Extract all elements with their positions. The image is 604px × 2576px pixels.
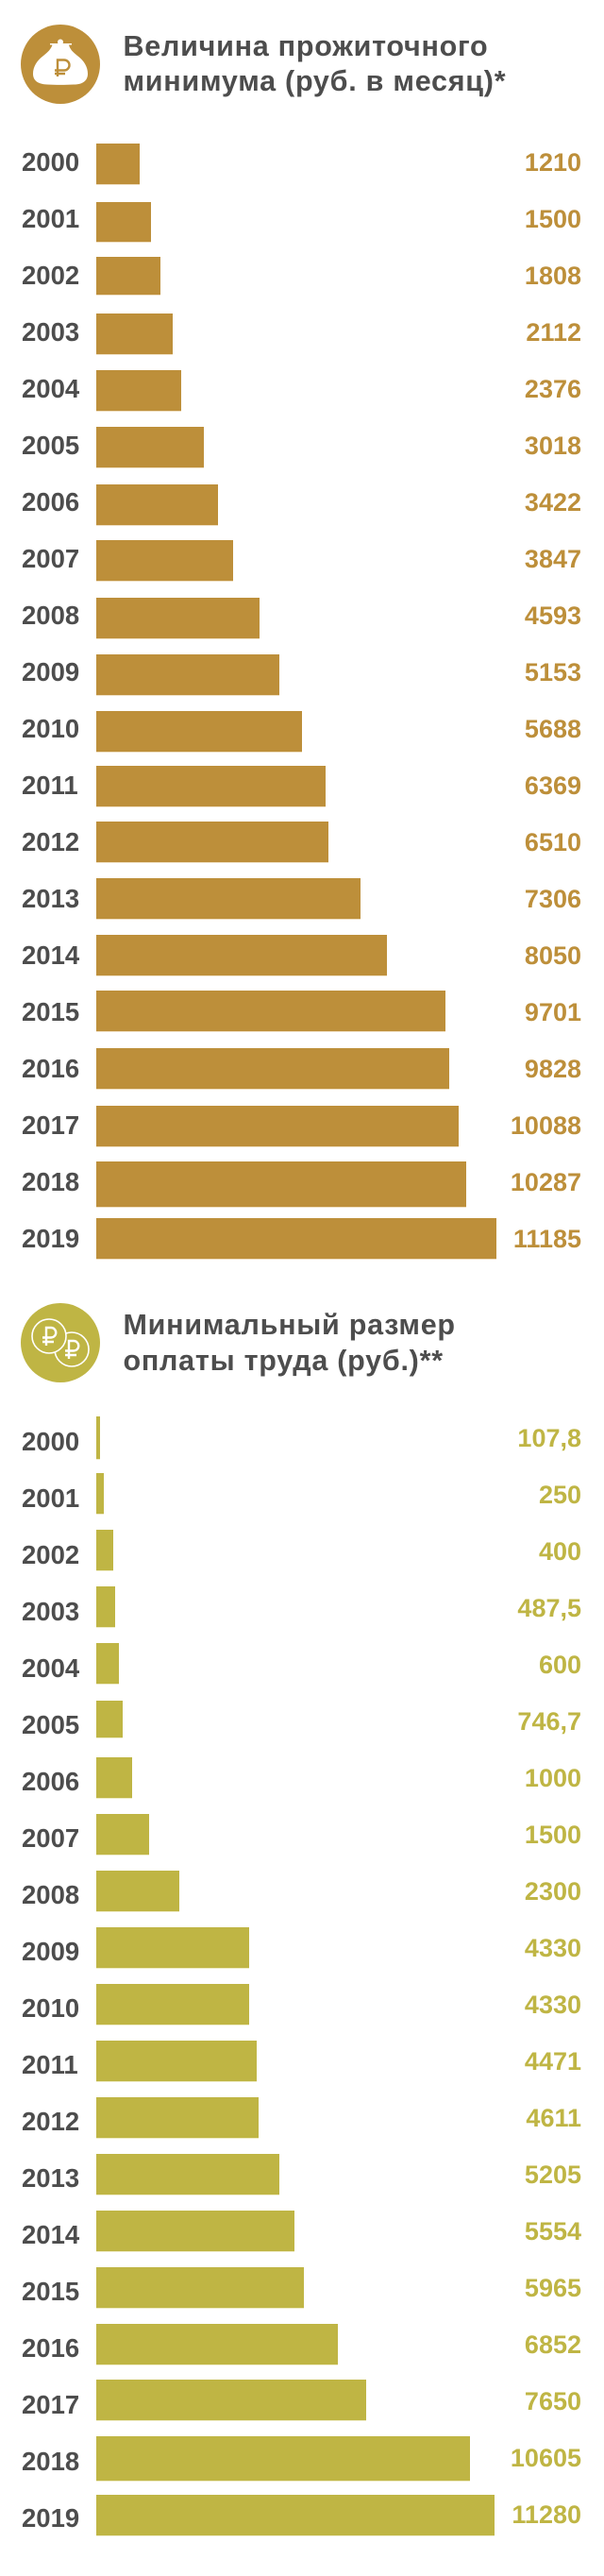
- row 2008: [22, 598, 581, 639]
- bar chart: subsistence minimum: [22, 144, 581, 1260]
- row 2005: 3018: [525, 432, 581, 460]
- row 2017: [22, 1106, 581, 1147]
- heading: minimum wage: [123, 1309, 456, 1377]
- row 2000: [22, 144, 581, 185]
- row 2013: [22, 878, 581, 920]
- row 2015: 9701: [525, 998, 581, 1026]
- row 2005: 2005: [22, 431, 79, 460]
- row 2010: 4330: [525, 1991, 581, 2019]
- row 2008: 2008: [22, 601, 79, 630]
- row 2014: 5554: [525, 2217, 581, 2246]
- row 2019: 11280: [512, 2500, 581, 2529]
- row 2010: 2010: [22, 1993, 79, 2023]
- heading: subsistence minimum: Величина прожиточного: [123, 30, 488, 62]
- row 2014: 8050: [525, 941, 581, 970]
- row 2006: [22, 1757, 581, 1799]
- row 2001: 2001: [22, 1483, 79, 1513]
- row 2003: 487,5: [517, 1594, 581, 1622]
- row 2010: [22, 1984, 581, 2025]
- row 2007: 2007: [22, 1823, 79, 1853]
- row 2005: 746,7: [517, 1707, 581, 1736]
- row 2010: [22, 711, 581, 753]
- row 2012: [22, 822, 581, 863]
- row 2004: 2376: [525, 375, 581, 403]
- row 2004: 2004: [22, 374, 79, 403]
- row 2014: [0, 2211, 604, 2252]
- icon: two ruble coins in olive circle: [21, 1303, 100, 1382]
- row 2006: 3422: [525, 488, 581, 517]
- row 2003: 2112: [526, 318, 581, 347]
- row 2000: 2000: [22, 1427, 79, 1456]
- row 2009: 4330: [525, 1934, 581, 1962]
- row 2012: 2012: [22, 2107, 79, 2136]
- row 2017: 2017: [22, 2390, 79, 2419]
- row 2000: 2000: [22, 147, 79, 177]
- row 2003: [22, 314, 581, 355]
- row 2000: 1210: [525, 148, 581, 177]
- row 2017: 7650: [525, 2387, 581, 2415]
- row 2008: 4593: [525, 602, 581, 630]
- row 2018: 2018: [22, 2447, 79, 2476]
- row 2006: [22, 484, 581, 526]
- row 2014: 2014: [22, 2220, 79, 2249]
- row 2001: 2001: [22, 204, 79, 233]
- row 2015: 2015: [22, 997, 79, 1026]
- row 2001: 250: [539, 1481, 581, 1509]
- row 2007: [22, 540, 581, 582]
- row 2002: 2002: [22, 261, 79, 290]
- row 2011: 2011: [22, 771, 78, 800]
- row 2001: [22, 1473, 581, 1515]
- icon: money bag in gold circle: [21, 25, 100, 104]
- heading: subsistence minimum: [123, 30, 506, 97]
- row 2008: [22, 1871, 581, 1912]
- row 2007: [22, 1814, 581, 1856]
- row 2007: 2007: [22, 544, 79, 573]
- row 2016: [22, 1048, 581, 1090]
- row 2010: 5688: [525, 715, 581, 743]
- row 2019: 11185: [513, 1225, 581, 1253]
- row 2004: [22, 1643, 581, 1685]
- row 2012: 2012: [22, 827, 79, 856]
- row 2003: 2003: [22, 317, 79, 347]
- row 2018: [22, 1161, 581, 1208]
- row 2011: 2011: [22, 2050, 78, 2079]
- row 2019: [22, 1218, 581, 1260]
- row 2009: 2009: [22, 657, 79, 686]
- row 2015: 5965: [525, 2274, 581, 2302]
- row 2018: 2018: [22, 1167, 79, 1196]
- row 2013: 5205: [525, 2161, 581, 2189]
- row 2004: [22, 370, 581, 412]
- row 2006: 2006: [22, 487, 79, 517]
- row 2009: [22, 654, 581, 696]
- row 2000: [22, 1416, 581, 1460]
- row 2002: 400: [539, 1537, 581, 1566]
- row 2017: 10088: [511, 1111, 581, 1140]
- row 2002: 2002: [22, 1540, 79, 1569]
- row 2002: [22, 257, 581, 296]
- row 2008: 2300: [525, 1877, 581, 1906]
- row 2016: 6852: [525, 2330, 581, 2359]
- row 2018: 10287: [511, 1168, 581, 1196]
- row 2006: 2006: [22, 1767, 79, 1796]
- row 2004: 2004: [22, 1653, 79, 1683]
- row 2010: 2010: [22, 714, 79, 743]
- row 2013: [22, 2154, 581, 2195]
- row 2001: [22, 202, 581, 243]
- row 2015: [22, 991, 581, 1032]
- row 2014: 2014: [22, 941, 79, 970]
- row 2009: 5153: [525, 658, 581, 686]
- row 2012: 4611: [526, 2104, 581, 2132]
- row 2008: 2008: [22, 1880, 79, 1909]
- row 2002: [22, 1530, 581, 1571]
- row 2005: 2005: [22, 1710, 79, 1739]
- row 2014: [22, 935, 581, 976]
- bar chart: minimum wage: [22, 1416, 581, 2536]
- row 2018: 10605: [511, 2444, 581, 2472]
- row 2019: [0, 2495, 604, 2536]
- row 2011: 4471: [525, 2047, 581, 2076]
- row 2004: 600: [539, 1651, 581, 1679]
- row 2017: 2017: [22, 1110, 79, 1140]
- row 2016: [0, 2324, 604, 2365]
- row 2019: 2019: [22, 2503, 79, 2533]
- row 2005: [22, 1701, 581, 1739]
- row 2016: 2016: [22, 2333, 79, 2363]
- heading: minimum wage: Минимальный размер: [123, 1309, 456, 1341]
- row 2005: [22, 427, 581, 468]
- row 2003: 2003: [22, 1597, 79, 1626]
- row 2006: 1000: [525, 1764, 581, 1792]
- heading: subsistence minimum: минимума (руб. в месяц)*: [123, 65, 506, 97]
- row 2001: 1500: [525, 205, 581, 233]
- row 2018: [0, 2436, 604, 2478]
- row 2017: [0, 2380, 604, 2421]
- row 2015: 2015: [22, 2277, 79, 2306]
- heading: minimum wage: оплаты труда (руб.)**: [123, 1345, 444, 1377]
- row 2000: 107,8: [517, 1424, 581, 1452]
- row 2019: 2019: [22, 1224, 79, 1253]
- row 2011: [22, 766, 581, 807]
- row 2007: 1500: [525, 1821, 581, 1849]
- row 2013: 7306: [525, 885, 581, 913]
- row 2016: 2016: [22, 1054, 79, 1083]
- row 2007: 3847: [525, 545, 581, 573]
- row 2002: 1808: [525, 262, 581, 290]
- row 2012: 6510: [525, 828, 581, 856]
- row 2009: [22, 1927, 581, 1969]
- row 2003: [22, 1586, 581, 1628]
- row 2011: 6369: [525, 771, 581, 800]
- row 2016: 9828: [525, 1055, 581, 1083]
- row 2015: [0, 2267, 604, 2309]
- row 2013: 2013: [22, 2163, 79, 2193]
- row 2013: 2013: [22, 884, 79, 913]
- row 2012: [22, 2097, 581, 2139]
- row 2011: [22, 2041, 581, 2082]
- row 2009: 2009: [22, 1937, 79, 1966]
